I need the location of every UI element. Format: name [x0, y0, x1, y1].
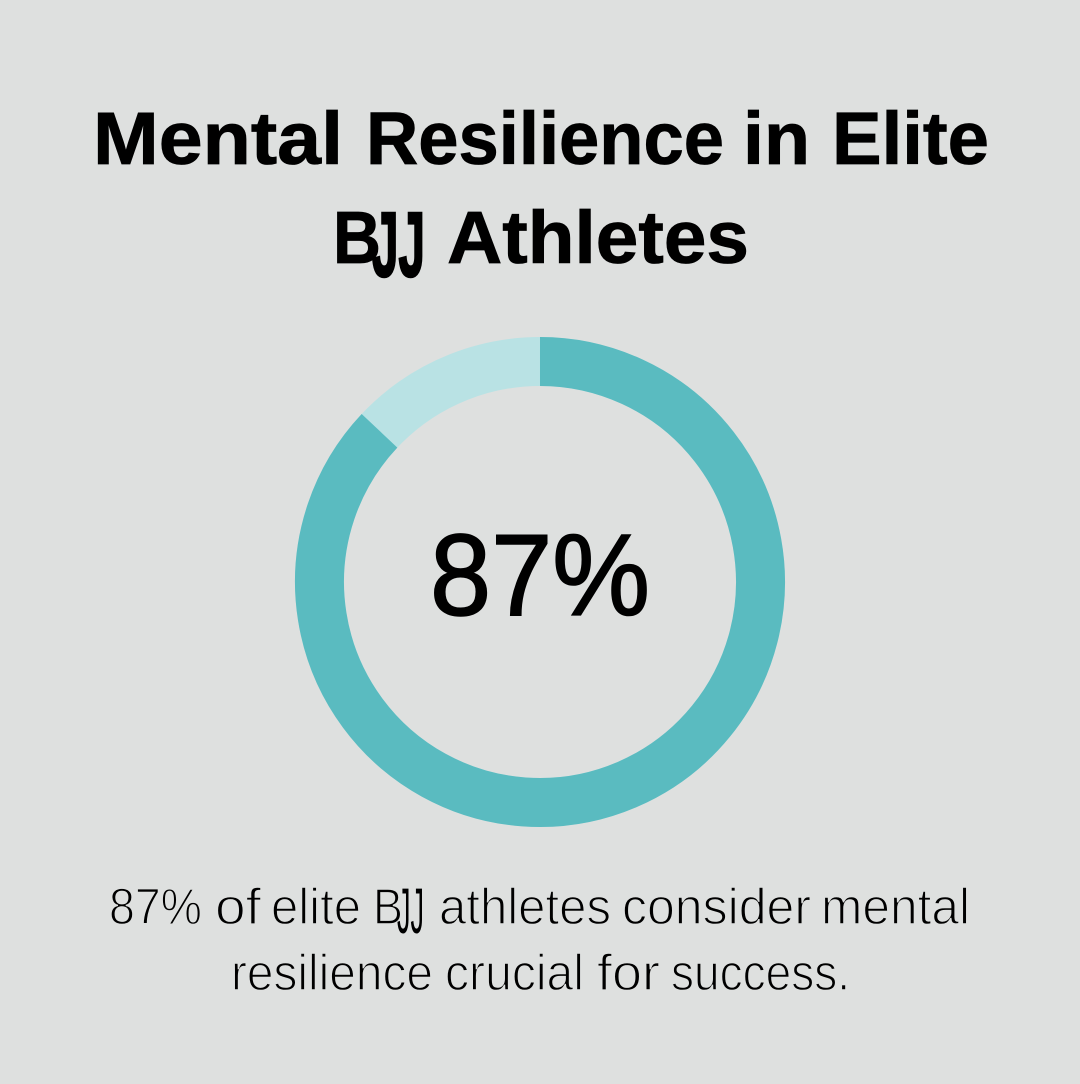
caption: of [215, 878, 262, 935]
title: in [743, 97, 810, 180]
caption: athletes [439, 878, 611, 935]
title: Mental [93, 97, 343, 180]
caption: JJ [397, 877, 424, 947]
caption: resilience [231, 944, 433, 1001]
caption: elite [271, 878, 361, 935]
center value: 87% [430, 510, 650, 640]
title: JJ [372, 193, 425, 296]
title: Resilience [366, 97, 724, 180]
caption: B [373, 878, 403, 935]
donut chart: 87% [319, 362, 760, 802]
title: Elite [832, 97, 989, 180]
title: Athletes [447, 196, 749, 279]
title [93, 97, 989, 296]
caption: consider [622, 878, 811, 935]
caption: for [597, 944, 660, 1001]
caption [109, 877, 970, 1001]
caption: success. [671, 944, 850, 1001]
caption: 87% [109, 878, 202, 935]
title: B [333, 196, 381, 279]
caption: mental [821, 878, 970, 935]
caption: crucial [445, 944, 584, 1001]
